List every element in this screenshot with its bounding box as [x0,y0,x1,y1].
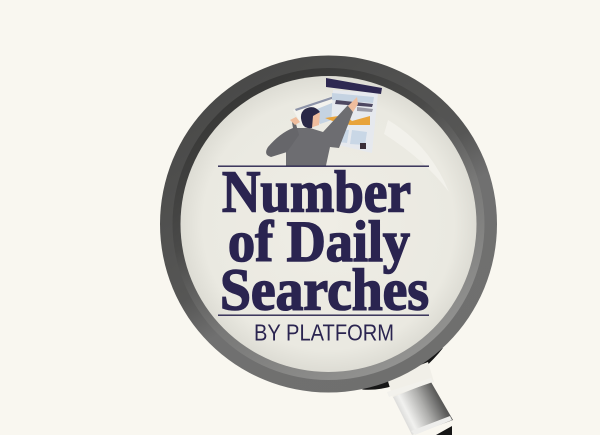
title: Searches [220,256,429,322]
chart sheet: right [325,78,382,153]
title: Number [222,158,411,224]
title [220,158,429,322]
illustration: man pinning charts [266,78,382,166]
man figure [266,97,358,166]
magnifier ring [160,56,497,392]
top rule [218,166,429,167]
subtitle: BY PLATFORM [254,320,394,346]
chart sheet: left [293,95,345,127]
lens glare [384,120,449,192]
title: of Daily [228,209,410,274]
glass lens [180,76,476,372]
bottom rule [218,314,429,316]
magnifier handle [362,348,453,435]
